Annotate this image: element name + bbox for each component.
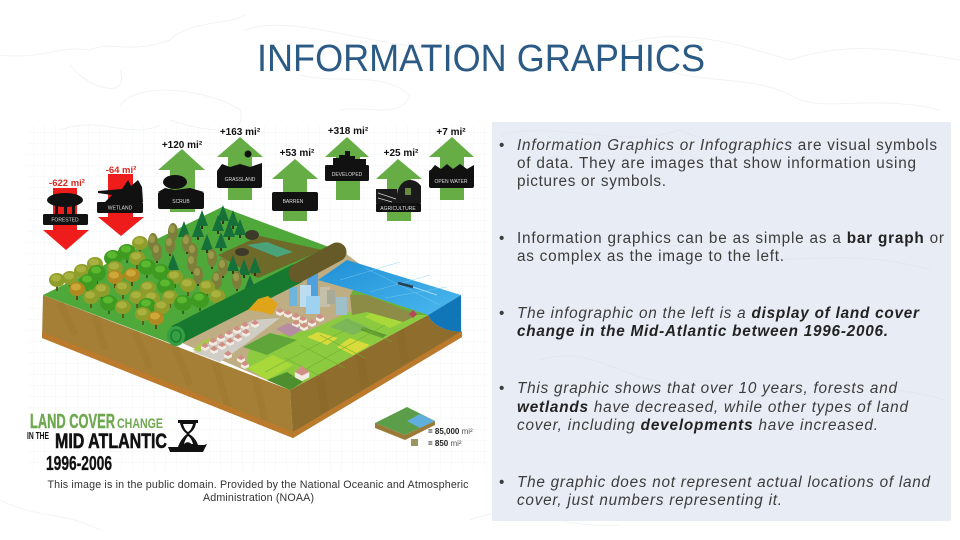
caption [48, 479, 469, 504]
bullet 3: change in the Mid-Atlantic between 1996-2006. [517, 323, 888, 340]
arrow: scrub: +120 mi² [162, 140, 203, 151]
bullet 4: • [499, 380, 504, 397]
bullet 4: cover, including developments have increased. [517, 417, 878, 434]
arrow: developed [325, 126, 369, 200]
bullet 1 [499, 137, 937, 190]
arrow: scrub: SCRUB [172, 199, 190, 205]
farmhouse [295, 366, 309, 381]
arrow: wetland: WETLAND [108, 206, 133, 212]
suburban houses [193, 308, 324, 369]
arrow: forested: FORESTED [51, 218, 79, 224]
arrow: scrub [158, 140, 205, 212]
infographic heading: CHANGE [117, 415, 163, 431]
arrow: open water: +7 mi² [436, 127, 466, 138]
bullet 5 [499, 474, 930, 509]
caption: Administration (NOAA) [203, 492, 314, 504]
bullet 1: • [499, 137, 504, 154]
arrow: forested: -622 mi² [49, 178, 85, 189]
arrow: open water [429, 127, 474, 200]
bullet 4: This graphic shows that over 10 years, forests and [517, 380, 897, 397]
bullet 3: • [499, 305, 504, 322]
sod roll [167, 252, 337, 346]
infographic heading: IN THE [27, 431, 49, 442]
ground surface east [175, 253, 428, 390]
left soil face [42, 295, 293, 438]
riverside pasture [350, 290, 428, 315]
arrow: wetland: -64 mi² [106, 165, 136, 176]
title: INFORMATION GRAPHICS [257, 38, 705, 80]
arrow: agriculture: +25 mi² [384, 148, 419, 159]
caption: This image is in the public domain. Provided by the National Oceanic and Atmospheric [48, 479, 469, 491]
bullet 2: as complex as the image to the left. [517, 248, 784, 265]
bullet 4: wetlands have decreased, while other types of land [517, 399, 908, 416]
arrow: barren [272, 148, 318, 221]
agricultural fields [243, 307, 428, 390]
forest ground [43, 207, 345, 345]
bullet 3: The infographic on the left is a display of land cover [517, 305, 920, 322]
arrow: developed: +318 mi² [328, 126, 369, 137]
scale legend: = 850 mi² [428, 439, 462, 448]
back farmland [218, 236, 322, 278]
infographic heading: LAND COVER [30, 411, 115, 433]
scale legend: = 85,000 mi² [428, 427, 473, 436]
bullet 5: The graphic does not represent actual locations of land [517, 474, 930, 491]
bulldozer [248, 296, 278, 315]
bullet 2: Information graphics can be as simple as a bar graph or [517, 230, 944, 247]
icon: hourglass with bulldozer [168, 420, 207, 452]
arrow: open water: OPEN WATER [434, 179, 468, 185]
arrow: barren: +53 mi² [280, 148, 315, 159]
arrow: barren: BARREN [283, 199, 304, 205]
arrow: wetland [97, 165, 144, 236]
infographic heading: 1996-2006 [46, 453, 112, 475]
bullet 1: of data. They are images that show information using [517, 155, 916, 172]
scale legend [375, 407, 473, 448]
land block diagram [42, 205, 462, 438]
panel: explanatory text [492, 122, 951, 521]
arrow: agriculture: AGRICULTURE [380, 206, 416, 212]
bullet 4 [499, 380, 908, 434]
forest trees [49, 205, 261, 329]
panel: land cover infographic [27, 125, 490, 475]
bullet 2: • [499, 230, 504, 247]
right soil face [290, 315, 462, 438]
arrow: grassland: +163 mi² [220, 127, 261, 138]
infographic heading [27, 411, 207, 475]
water side face [428, 295, 461, 332]
bullet 2 [499, 230, 944, 265]
arrow: forested [43, 178, 89, 250]
bullet 1: pictures or symbols. [517, 173, 666, 190]
arrow: agriculture [376, 148, 422, 221]
city towers [289, 273, 347, 315]
arrow: grassland [217, 127, 263, 200]
arrow: developed: DEVELOPED [332, 172, 363, 178]
bullet 5: • [499, 474, 504, 491]
bullet 3 [499, 305, 920, 340]
water surface [318, 260, 461, 315]
bullet 5: cover, just numbers representing it. [517, 492, 782, 509]
bullet 1: Information Graphics or Infographics are visual symbols [517, 137, 937, 154]
infographic heading: MID ATLANTIC [55, 430, 167, 453]
arrow: grassland: GRASSLAND [225, 177, 256, 183]
